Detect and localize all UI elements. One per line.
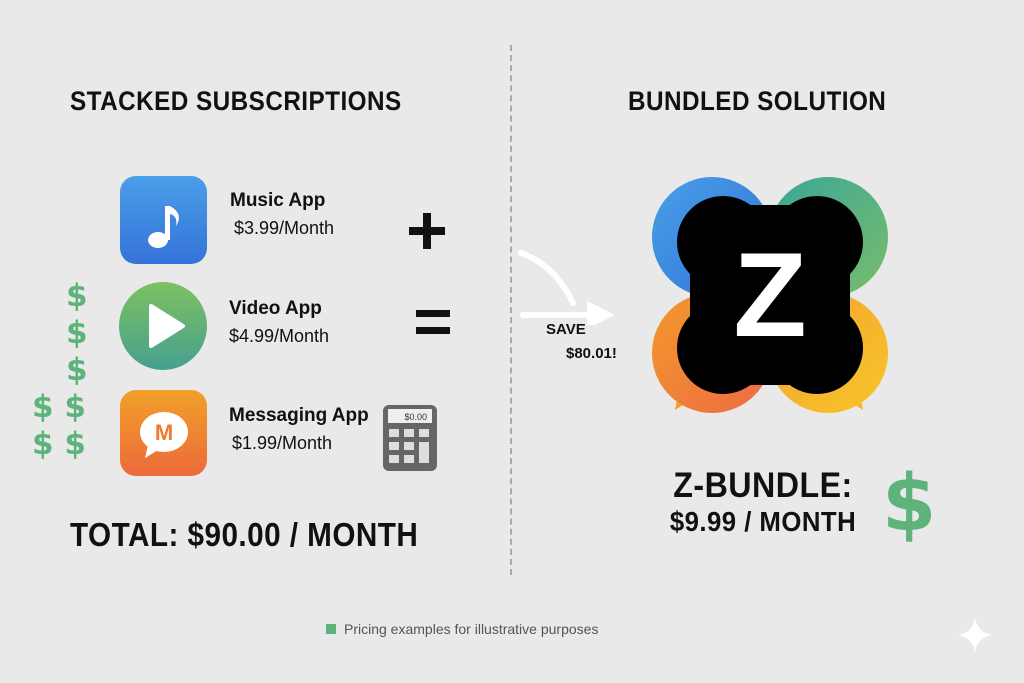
total: TOTAL: $90.00 / MONTH	[70, 516, 418, 553]
text: z-bundle price: Z-BUNDLE:	[673, 466, 853, 505]
text: messaging app: $1.99/Month	[232, 433, 332, 453]
icon: music app	[120, 176, 207, 264]
icon: calculator: $0.00	[404, 412, 427, 422]
text: music app: $3.99/Month	[234, 218, 334, 238]
footer note: Pricing examples for illustrative purposes	[344, 621, 598, 637]
text: z-bundle price	[670, 466, 856, 537]
icon: sparkle	[958, 618, 992, 652]
callout: save: $80.01!	[566, 345, 617, 362]
text: z-bundle price: $9.99 / MONTH	[670, 506, 856, 537]
title: stacked subscriptions: STACKED SUBSCRIPTIONS	[70, 86, 402, 116]
text: messaging app: Messaging App	[229, 405, 369, 426]
callout: save	[546, 321, 617, 362]
icon: dollar stack: $ $	[32, 426, 86, 462]
icon: z-bundle logo: Z	[733, 228, 807, 362]
icon: equals	[416, 310, 450, 334]
icon: video app	[119, 282, 207, 370]
icon: dollar stack: $	[66, 315, 88, 351]
callout: save: SAVE	[546, 321, 586, 338]
icon: dollar stack	[32, 278, 88, 462]
icon: messaging app	[120, 390, 207, 476]
text: music app	[230, 190, 334, 238]
text: video app	[229, 298, 329, 346]
text: video app: $4.99/Month	[229, 326, 329, 346]
icon: dollar stack: $ $	[32, 389, 86, 425]
divider	[510, 45, 512, 575]
icon: messaging app: M	[155, 420, 173, 445]
icon: z-bundle logo	[652, 177, 888, 413]
icon: big dollar: $	[882, 459, 936, 549]
text: video app: Video App	[229, 298, 322, 319]
text: music app: Music App	[230, 190, 325, 211]
title: bundled solution: BUNDLED SOLUTION	[628, 86, 886, 116]
icon: dollar stack: $	[66, 278, 88, 314]
icon: plus	[409, 213, 445, 249]
icon: calculator	[383, 405, 437, 471]
text: messaging app	[229, 405, 369, 453]
icon: dollar stack: $	[66, 352, 88, 388]
arrow: save	[518, 250, 614, 325]
